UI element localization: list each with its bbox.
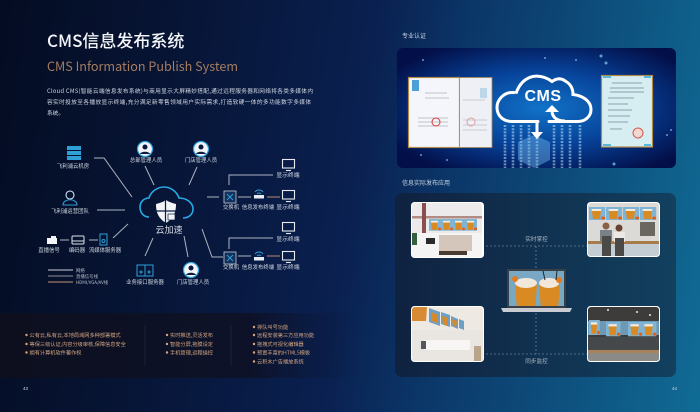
label: display A: 显示终端 [276,170,300,179]
intro text block: Cloud CMS(智能云端信息发布系统)与商用显示大屏精妙搭配,通过远程服务器和网络将各类多媒体内 [47,86,313,95]
sparkle dots [420,54,672,166]
document: middle certificate [460,78,492,148]
intro text block: 系统。 [47,108,64,117]
feature list 2: 实时推送,灵活发布 [170,331,213,339]
HDMI lines [267,197,280,256]
document: right certificate [602,76,652,147]
photo: dark cafe [587,306,660,362]
feature list 2: 智能分屏,拖膜设定 [170,340,213,348]
label: business interface server: 业务接口服务器 [126,278,164,286]
icon: camera [47,236,57,244]
label: realtime control: 实时掌控 [525,235,548,243]
label: sync monitoring: 同步监控 [525,357,548,365]
label: terminal 1: 信息发布终端 [242,203,275,211]
label: terminal 2: 信息发布终端 [242,263,275,271]
label: display B: 显示终端 [276,202,300,211]
hub label: 云加速 [155,223,183,236]
feature list 3: 远程安装第三方应用功能 [257,331,314,339]
panel: applications [395,193,676,377]
legend [48,267,109,286]
photo: staff [587,202,660,257]
label: encoder: 编码器 [69,246,86,254]
feature list 3 [253,323,314,366]
connection lines [60,158,273,257]
feature list 3: 拖拽式可视化编辑器 [257,340,305,348]
label: streaming server: 流媒体服务器 [89,246,122,254]
icon: store admin top [194,142,208,156]
document: left certificate [408,78,460,148]
page number left: 43 [23,386,29,391]
feature list 3: 排队叫号功能 [257,323,288,331]
label: cloud server room: 飞利浦云机房 [57,162,89,170]
icon: encoder [72,236,84,244]
legend: HDMI/VGA/AV线 [76,279,109,286]
data columns [505,125,580,168]
icon: cloud server room [67,146,81,160]
legend: 网络 [76,267,85,274]
feature list 3: 预置丰富的HTML5模板 [257,348,311,356]
icon: streaming server [100,234,107,245]
dashed connectors [486,246,587,354]
label: store admin top: 门店管理人员 [185,156,218,164]
cloud acceleration hub [140,187,193,236]
network diagram [38,142,300,286]
label: switch 1: 交换机 [223,203,240,211]
icon: terminal 2 [254,252,264,260]
label: operations team: 飞利浦运营团队 [51,207,89,215]
heading: applications: 信息实际发布应用 [402,178,450,187]
feature list 1: 公有云,私有云,本地局域网多种部署模式 [30,331,121,339]
CMS cloud [497,76,591,139]
icon: shield [156,200,176,223]
legend: 直播信号线 [76,273,99,280]
page number right: 44 [672,386,678,391]
feature list 1: 等保三级认证,内容分级审核,保障信息安全 [30,340,127,348]
CMS label: CMS [524,88,562,105]
icon: business interface server [137,265,153,276]
laptop [501,269,572,312]
label: live signal: 直播信号 [38,246,60,254]
glowing cube [518,135,550,168]
icon: operations team [63,191,77,205]
label: switch 2: 交换机 [223,263,240,271]
label: display C: 显示终端 [276,234,300,243]
icon: HQ admin [138,142,152,156]
heading: certification: 专业认证 [402,31,426,40]
photo: white interior [411,306,484,362]
intro text block: 容实时投放至各播放显示终端,充分满足新零售领域用户实际需求,打造软硬一体的多功能数字多媒体 [47,97,311,106]
panel: feature band [0,313,360,378]
feature list 1: 拥有计算机软件著作权 [30,348,82,356]
icon: switch 1 [224,191,236,203]
photo: store counter [411,202,484,258]
icon: display D [282,252,294,262]
icon: display A [282,160,294,170]
subtitle: CMS Information Publish System [47,56,238,75]
icon: terminal 1 [254,190,264,198]
icon: store admin bottom [184,262,198,278]
feature list 3: 云积木广告播放系统 [257,358,304,366]
title: CMS信息发布系统 [47,27,184,52]
icon: display B [282,190,294,202]
intro text block [47,86,313,117]
feature list 1 [25,331,127,356]
panel: certification image [397,48,676,168]
icon: display C [282,222,294,234]
label: HQ admin: 总部管理人员 [130,156,163,164]
feature list 2 [166,331,213,356]
label: display D: 显示终端 [276,262,300,271]
icon: switch 2 [224,252,236,264]
label: store admin bottom: 门店管理人员 [177,278,210,286]
feature list 2: 手机管理,远程操控 [170,348,213,356]
